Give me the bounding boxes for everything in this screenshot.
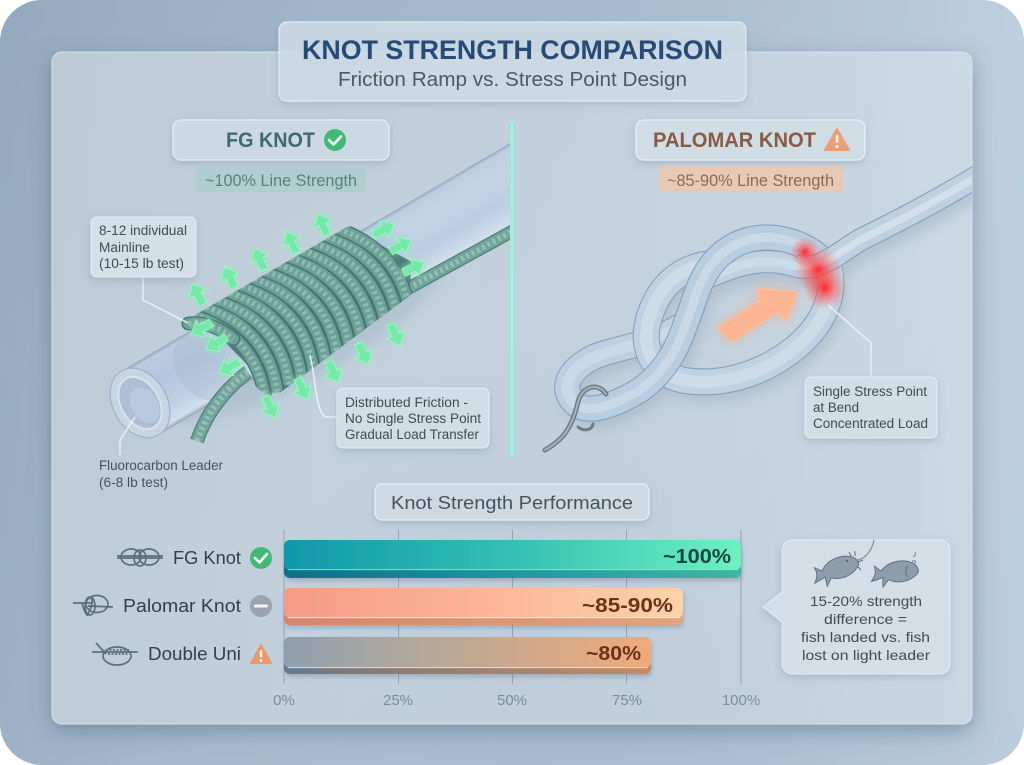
icon: warning bbox=[251, 645, 271, 663]
fluorocarbon leader tube bbox=[110, 144, 510, 438]
grid lines bbox=[284, 530, 741, 684]
label: fluorocarbon leader: (6-8 lb test) bbox=[99, 475, 168, 490]
chart heading bbox=[375, 484, 649, 520]
callout: strength difference: difference = bbox=[824, 611, 907, 627]
axis labels bbox=[273, 692, 760, 709]
label: fluorocarbon leader: Fluorocarbon Leader bbox=[99, 458, 223, 473]
chart heading: Knot Strength Performance bbox=[391, 492, 633, 513]
strength tag: Palomar: ~85-90% Line Strength bbox=[667, 172, 834, 190]
callout: single stress point: Single Stress Point bbox=[813, 384, 927, 399]
strand tail under the loop bbox=[567, 238, 828, 409]
heading: FG knot bbox=[173, 120, 389, 160]
main panel bbox=[52, 52, 972, 724]
callout: mainline bbox=[91, 217, 196, 323]
axis labels: 75% bbox=[612, 692, 642, 709]
callout: strength difference: lost on light leader bbox=[802, 647, 930, 663]
illustration: FG knot on leader bbox=[110, 144, 510, 444]
heading: FG knot: FG KNOT bbox=[226, 129, 315, 152]
bar: FG knot bbox=[284, 540, 741, 578]
callout: mainline: Mainline bbox=[99, 240, 150, 255]
icon: FG knot bbox=[117, 549, 163, 566]
row label: Double Uni: Double Uni bbox=[148, 644, 241, 664]
heading: Palomar knot bbox=[636, 120, 865, 160]
callout: single stress point bbox=[805, 305, 937, 438]
title: KNOT STRENGTH COMPARISON bbox=[302, 35, 723, 65]
row label: FG knot: FG Knot bbox=[173, 548, 241, 568]
icon: Double Uni knot bbox=[92, 643, 138, 665]
row label: Palomar knot: Palomar Knot bbox=[123, 596, 241, 616]
callout: strength difference: fish landed vs. fish bbox=[801, 629, 930, 645]
orange force arrow bbox=[717, 288, 798, 342]
icon: green check bbox=[324, 129, 346, 151]
wrap coils bbox=[181, 226, 412, 396]
callout: distributed friction bbox=[310, 355, 489, 448]
bar: FG knot: ~100% bbox=[663, 546, 731, 568]
row label: FG knot bbox=[117, 547, 272, 569]
callout: strength difference bbox=[763, 540, 950, 674]
bar: Palomar knot bbox=[284, 588, 683, 625]
axis labels: 0% bbox=[273, 692, 295, 709]
axis labels: 100% bbox=[722, 692, 760, 709]
callout: distributed friction: Distributed Friction - bbox=[345, 395, 468, 410]
mainline strands bbox=[197, 227, 520, 441]
icon: fish lost bbox=[811, 540, 874, 589]
crossing strand bbox=[577, 238, 828, 409]
bar chart bbox=[273, 530, 760, 709]
heading: Palomar knot: PALOMAR KNOT bbox=[653, 129, 816, 152]
bar: Double Uni bbox=[284, 637, 651, 674]
strength tag: FG bbox=[196, 167, 366, 192]
axis labels: 50% bbox=[497, 692, 527, 709]
big loop bbox=[646, 262, 831, 382]
hook bbox=[545, 387, 606, 450]
callout: mainline: 8-12 individual bbox=[99, 223, 187, 238]
stress glow bbox=[790, 237, 847, 310]
callout: single stress point: Concentrated Load bbox=[813, 416, 928, 431]
icon: pass bbox=[250, 547, 272, 569]
callout: distributed friction: Gradual Load Transfer bbox=[345, 427, 479, 442]
subtitle: Friction Ramp vs. Stress Point Design bbox=[338, 69, 687, 91]
green load arrows bbox=[184, 210, 428, 421]
icon: Palomar knot bbox=[73, 596, 113, 615]
icon: warning triangle bbox=[825, 129, 849, 150]
callout: distributed friction: No Single Stress Point bbox=[345, 411, 481, 426]
bar: Palomar knot: ~85-90% bbox=[582, 595, 673, 617]
strength tag: FG: ~100% Line Strength bbox=[205, 172, 357, 190]
row label: Double Uni bbox=[92, 643, 271, 665]
divider bbox=[509, 122, 515, 457]
row label: Palomar knot bbox=[73, 595, 272, 617]
icon: neutral bbox=[250, 595, 272, 617]
title card bbox=[279, 22, 746, 101]
icon: fish landed bbox=[872, 552, 918, 587]
label: fluorocarbon leader bbox=[99, 417, 223, 490]
callout: mainline: (10-15 lb test) bbox=[99, 256, 184, 271]
standing line top section bbox=[795, 176, 978, 267]
illustration: Palomar knot bbox=[545, 176, 983, 450]
standing line under the crossing strand bbox=[702, 176, 978, 280]
axis labels: 25% bbox=[383, 692, 413, 709]
callout: single stress point: at Bend bbox=[813, 400, 859, 415]
strength tag: Palomar bbox=[659, 166, 843, 192]
bar: Double Uni: ~80% bbox=[586, 643, 641, 665]
callout: strength difference: 15-20% strength bbox=[810, 593, 922, 609]
